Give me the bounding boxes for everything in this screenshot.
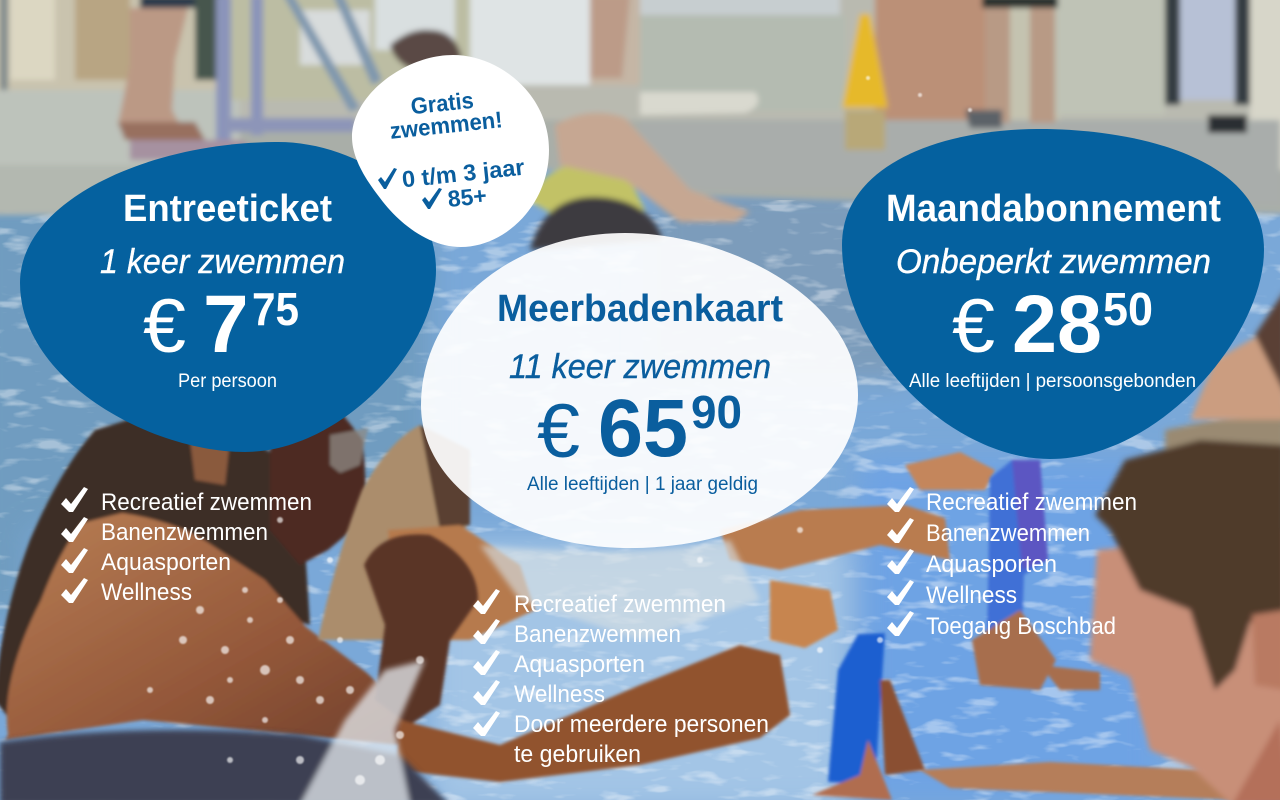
badge text: 85+ xyxy=(446,182,488,212)
list: maandabonnement features: Aquasporten xyxy=(926,551,1057,578)
dark water and splash xyxy=(0,540,760,800)
subheading: 11 keer zwemmen: 11 keer zwemmen xyxy=(509,348,771,386)
list: meerbadenkaart features: Aquasporten xyxy=(514,651,645,678)
list: maandabonnement features xyxy=(887,487,1137,640)
poles xyxy=(216,0,231,140)
list: entreeticket features xyxy=(61,487,312,606)
badge text xyxy=(389,87,526,212)
price: 65.90 xyxy=(537,383,742,474)
price: 65.90: 65 xyxy=(598,383,688,474)
heading: meerbadenkaart: Meerbadenkaart xyxy=(497,288,783,330)
sunbather on float xyxy=(528,160,645,218)
legs xyxy=(118,8,188,125)
panel: meerbadenkaart xyxy=(421,233,858,548)
list: maandabonnement features: Recreatief zwemmen xyxy=(926,489,1137,516)
price: 7.75: 75 xyxy=(252,283,299,335)
list: entreeticket features: Aquasporten xyxy=(101,549,231,576)
icon: check 0 t/m 3 jaar xyxy=(378,168,397,189)
foam boards and hands xyxy=(812,460,1240,800)
badge shape xyxy=(352,55,549,247)
list: meerbadenkaart features: te gebruiken xyxy=(514,741,641,768)
list: maandabonnement features: Wellness xyxy=(926,582,1017,609)
list: meerbadenkaart features: Recreatief zwemmen xyxy=(514,591,726,618)
subheading: onbeperkt zwemmen: Onbeperkt zwemmen xyxy=(896,243,1211,281)
price: 7.75 xyxy=(143,279,299,370)
price: 65.90: 90 xyxy=(691,386,742,438)
man with braids xyxy=(0,405,410,745)
badge text: Gratis xyxy=(409,87,475,119)
note: per persoon: Per persoon xyxy=(178,371,277,392)
second face behind the blob xyxy=(1190,290,1280,420)
panel: entreeticket xyxy=(20,142,436,452)
price: 28.50: € xyxy=(952,284,995,369)
list: maandabonnement features: Toegang Boschbad xyxy=(926,613,1116,640)
blob: maandabonnement xyxy=(842,129,1264,459)
list: entreeticket features: Banenzwemmen xyxy=(101,519,268,546)
list: maandabonnement features: Banenzwemmen xyxy=(926,520,1090,547)
list: meerbadenkaart features: Banenzwemmen xyxy=(514,621,681,648)
list: meerbadenkaart features xyxy=(473,589,769,768)
price: 28.50: 50 xyxy=(1103,283,1153,335)
list: entreeticket features: Recreatief zwemmen xyxy=(101,489,312,516)
price: 28.50: 28 xyxy=(1012,279,1102,370)
list: meerbadenkaart features: Wellness xyxy=(514,681,605,708)
price: 28.50 xyxy=(952,279,1153,370)
heading: maandabonnement: Maandabonnement xyxy=(886,188,1221,230)
heading: entreeticket: Entreeticket xyxy=(123,188,332,230)
badge text: zwemmen! xyxy=(389,106,504,144)
price: 7.75: € xyxy=(143,284,186,369)
girl with blond hair xyxy=(318,425,535,640)
boy in foreground xyxy=(1090,405,1280,800)
price: 7.75: 7 xyxy=(203,279,249,370)
blob: meerbadenkaart xyxy=(421,233,858,548)
blob: entreeticket xyxy=(20,142,436,452)
panel: maandabonnement xyxy=(842,129,1264,459)
price: 65.90: € xyxy=(537,389,580,474)
badge text: 0 t/m 3 jaar xyxy=(401,154,526,192)
head at the back xyxy=(390,30,462,72)
list: entreeticket features: Wellness xyxy=(101,579,192,606)
pool hall, blurred xyxy=(0,0,1280,250)
panel: gratis zwemmen badge xyxy=(352,55,549,247)
icon: check 85+ xyxy=(422,188,442,209)
list: meerbadenkaart features: Door meerdere personen xyxy=(514,711,769,738)
note: alle leeftijden persoonsgebonden: Alle leeftijden | persoonsgebonden xyxy=(909,371,1196,392)
fist and arms xyxy=(364,452,995,782)
water droplets xyxy=(147,76,972,785)
subheading: 1 keer zwemmen: 1 keer zwemmen xyxy=(100,243,345,281)
note: alle leeftijden 1 jaar geldig: Alle leeftijden | 1 jaar geldig xyxy=(527,474,758,495)
